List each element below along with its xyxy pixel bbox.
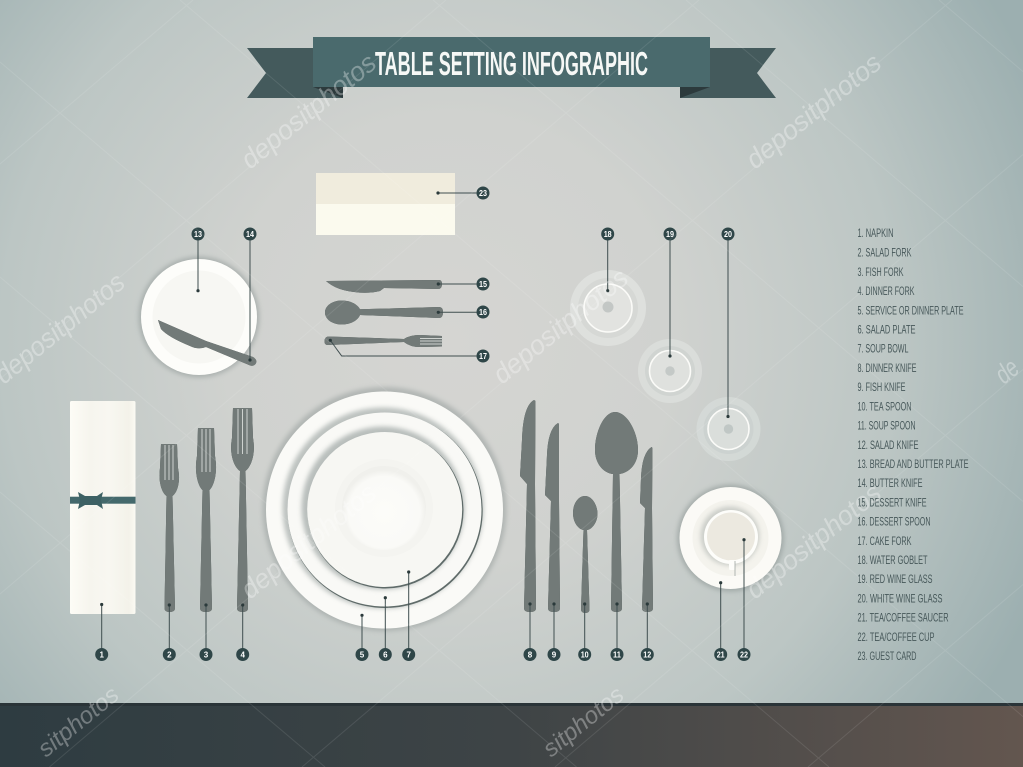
salad plate	[282, 408, 484, 608]
callout 22: 22	[740, 650, 748, 659]
legend list: 15. DESSERT KNIFE	[858, 495, 926, 509]
legend list	[858, 226, 968, 663]
callout 22	[738, 538, 750, 661]
callout 16	[437, 306, 490, 318]
legend list: 6. SALAD PLATE	[858, 322, 916, 336]
callout 17	[329, 339, 490, 362]
watermark overlay: depositphotos	[487, 263, 634, 390]
callout 3: 3	[204, 650, 209, 659]
red wine glass	[638, 339, 702, 403]
table edge	[0, 703, 1023, 767]
napkin bow	[78, 492, 103, 509]
soup bowl	[302, 426, 464, 590]
callout 19: 19	[666, 230, 674, 239]
callout 5: 5	[360, 650, 365, 659]
dinner fork	[231, 408, 254, 612]
bread and butter plate	[138, 256, 260, 378]
callout 8	[524, 602, 536, 661]
salad knife	[640, 447, 653, 612]
tea/coffee cup	[700, 506, 760, 576]
legend list: 14. BUTTER KNIFE	[858, 476, 922, 490]
callout 19	[664, 228, 676, 358]
water goblet	[570, 270, 646, 346]
callout 12: 12	[643, 650, 652, 659]
legend list: 23. GUEST CARD	[858, 649, 917, 663]
napkin ribbon	[70, 497, 136, 504]
guest card	[316, 173, 455, 235]
butter knife	[158, 320, 256, 366]
legend list: 7. SOUP BOWL	[858, 342, 909, 356]
fish fork	[196, 428, 216, 612]
watermark overlay: depositphotos	[740, 48, 887, 175]
title banner	[247, 37, 776, 98]
fish knife	[545, 423, 560, 612]
callout 20: 20	[724, 230, 732, 239]
legend list: 9. FISH KNIFE	[858, 380, 906, 394]
tea/coffee saucer	[677, 484, 784, 592]
watermark overlay: sitphotos	[538, 681, 629, 763]
legend list: 11. SOUP SPOON	[858, 419, 916, 433]
callout 15	[437, 278, 490, 290]
legend list: 22. TEA/COFFEE CUP	[858, 630, 934, 644]
watermark overlay: sitphotos	[33, 681, 124, 763]
banner folds	[313, 87, 710, 98]
dinner knife	[520, 400, 536, 612]
callout 1: 1	[99, 650, 104, 659]
legend list: 21. TEA/COFFEE SAUCER	[858, 611, 949, 625]
legend list: 4. DINNER FORK	[858, 284, 914, 298]
legend list: 1. NAPKIN	[858, 226, 894, 240]
callout 11	[610, 602, 624, 661]
callout 21: 21	[717, 650, 725, 659]
callout 6: 6	[383, 650, 388, 659]
callout 6	[379, 596, 392, 661]
callout 23: 23	[479, 189, 487, 198]
tea spoon	[573, 496, 598, 613]
callout 21	[714, 581, 727, 661]
dessert knife	[326, 280, 442, 293]
callout 10	[578, 602, 591, 661]
callout 14: 14	[246, 230, 254, 239]
legend list: 19. RED WINE GLASS	[858, 572, 932, 586]
legend list: 2. SALAD FORK	[858, 246, 912, 260]
callout 7: 7	[406, 650, 411, 659]
callout 18: 18	[604, 230, 612, 239]
callout 8: 8	[528, 650, 533, 659]
banner right tail	[680, 48, 776, 98]
legend list: 16. DESSERT SPOON	[858, 515, 930, 529]
callout 18	[601, 228, 614, 292]
callout 13	[192, 228, 204, 292]
legend list: 3. FISH FORK	[858, 265, 904, 279]
watermark overlay: depositphotos	[235, 478, 382, 605]
banner left tail	[247, 48, 343, 98]
legend list: 20. WHITE WINE GLASS	[858, 591, 942, 605]
callout 9: 9	[552, 650, 557, 659]
service or dinner plate	[262, 387, 506, 631]
callout 12	[641, 602, 654, 661]
callout 1	[95, 603, 108, 661]
cake fork	[324, 335, 443, 347]
callout 2	[163, 603, 176, 661]
callout 10: 10	[581, 650, 589, 659]
title: TABLE SETTING INFOGRAPHIC	[375, 45, 648, 82]
callout 2: 2	[167, 650, 172, 659]
napkin	[70, 401, 136, 614]
watermark overlay: depositphotos	[740, 478, 887, 605]
legend list: 17. CAKE FORK	[858, 534, 912, 548]
callout 4: 4	[240, 650, 245, 659]
legend list: 8. DINNER KNIFE	[858, 361, 916, 375]
callout 9	[548, 602, 560, 661]
legend list: 18. WATER GOBLET	[858, 553, 928, 567]
soup spoon	[595, 412, 638, 612]
legend list: 12. SALAD KNIFE	[858, 438, 918, 452]
callout 14	[244, 228, 256, 362]
callout 15: 15	[479, 280, 487, 289]
callout 11: 11	[613, 650, 622, 659]
callout 7	[402, 570, 415, 661]
callout 4	[236, 603, 249, 661]
callout 17: 17	[479, 352, 487, 361]
callout 23	[436, 186, 490, 200]
callout 20	[722, 228, 734, 418]
callout 5	[356, 614, 368, 661]
callout 16: 16	[479, 308, 487, 317]
watermark overlay: depositphotos	[235, 48, 382, 175]
salad fork	[159, 444, 179, 612]
legend list: 10. TEA SPOON	[858, 399, 912, 413]
banner main	[313, 37, 710, 87]
callout 13: 13	[194, 230, 202, 239]
callout 3	[200, 603, 212, 661]
dessert spoon	[325, 300, 443, 324]
white wine glass	[696, 397, 760, 461]
